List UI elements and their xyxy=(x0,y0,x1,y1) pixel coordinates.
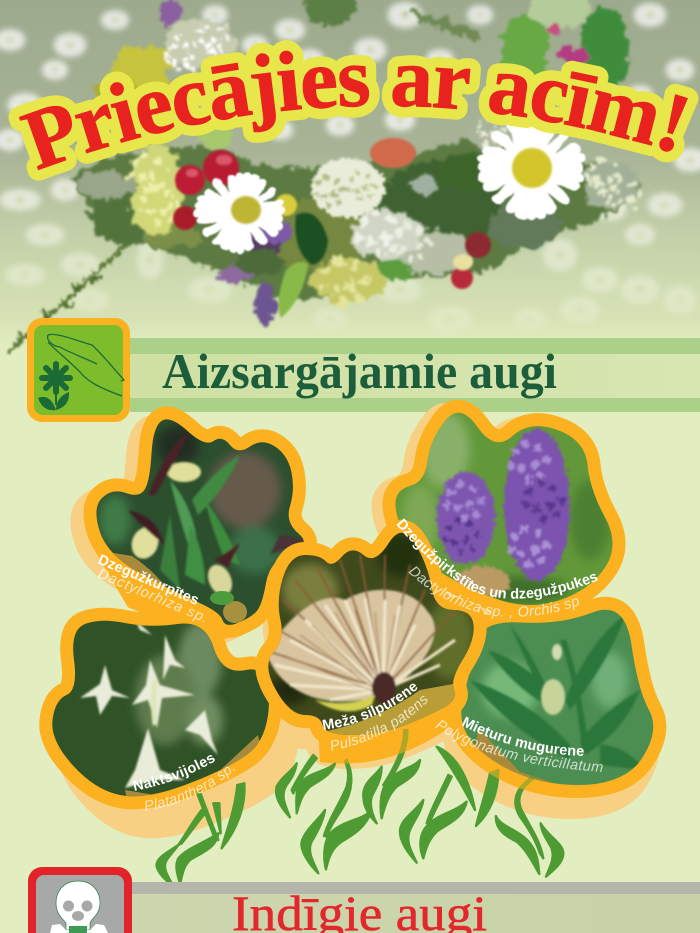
title: Priecājies ar acīm!: Priecājies ar acīm! xyxy=(18,50,688,170)
dark green leaf xyxy=(295,213,328,265)
caption: Polygonatum verticillatum: Polygonatum verticillatum xyxy=(435,720,603,772)
leaf sprigs behind plant shapes xyxy=(157,730,563,887)
left foliage and lime blossoms xyxy=(75,121,231,249)
red berries xyxy=(173,150,239,230)
icon: hand over flower xyxy=(27,318,130,422)
panel: Dzegužpirkstītes un dzegužpukes photo xyxy=(390,400,620,615)
caption: Meža silpurene: Meža silpurene xyxy=(322,684,418,730)
caption: Mieturu mugurene: Mieturu mugurene xyxy=(462,716,584,756)
top branches and foliage xyxy=(92,0,629,109)
caption: Dzegužkurpītes: Dzegužkurpītes xyxy=(95,552,201,609)
caption: Pulsatilla patens: Pulsatilla patens xyxy=(331,696,428,751)
lime leaf xyxy=(278,262,308,318)
icon: skull and crossbones xyxy=(28,867,132,933)
section band: poisonous plants xyxy=(130,882,700,933)
leaf sprigs tinted over plant shapes xyxy=(157,730,563,887)
skull xyxy=(56,881,100,930)
caption: Dactylorhiza sp.: Dactylorhiza sp. xyxy=(95,566,210,627)
caption: Platanthera sp.: Platanthera sp. xyxy=(146,766,235,811)
hand outline xyxy=(48,334,124,396)
center foliage xyxy=(247,114,642,271)
clover blossom xyxy=(311,158,385,218)
yellow bud xyxy=(275,194,297,216)
caption: Naktsvijoles: Naktsvijoles xyxy=(133,755,215,791)
floral wreath xyxy=(8,0,642,353)
heading: Aizsargājamie augi: Aizsargājamie augi xyxy=(162,343,557,399)
panel: Naktsvijoles photo xyxy=(45,610,275,815)
plant captions xyxy=(95,518,603,811)
daisy left xyxy=(194,170,286,254)
section band: protected plants xyxy=(130,338,700,412)
caption: Dactylorhiza sp. , Orchis sp.: Dactylorhiza sp. , Orchis sp. xyxy=(408,566,579,619)
orange mushroom xyxy=(370,138,416,168)
crossbones xyxy=(50,924,108,933)
daisy right xyxy=(483,122,579,214)
flower xyxy=(38,364,70,410)
caption: Dzegužpirkstītes un dzegužpukes: Dzegužpirkstītes un dzegužpukes xyxy=(396,518,598,600)
wreath stem to lower left xyxy=(8,235,135,353)
panel: Meža silpurene photo xyxy=(250,520,485,764)
panel: Dzegužkurpītes photo xyxy=(90,415,315,640)
wreath foliage base mass xyxy=(70,138,640,299)
panel: Mieturu mugurene photo xyxy=(455,605,665,795)
plant shapes: soft orange shadows xyxy=(70,415,647,826)
lower sprigs xyxy=(214,208,473,323)
strawberries xyxy=(451,232,491,289)
purple flower xyxy=(262,220,292,244)
title: Priecājies ar acīm!: Priecājies ar acīm! xyxy=(8,40,698,181)
